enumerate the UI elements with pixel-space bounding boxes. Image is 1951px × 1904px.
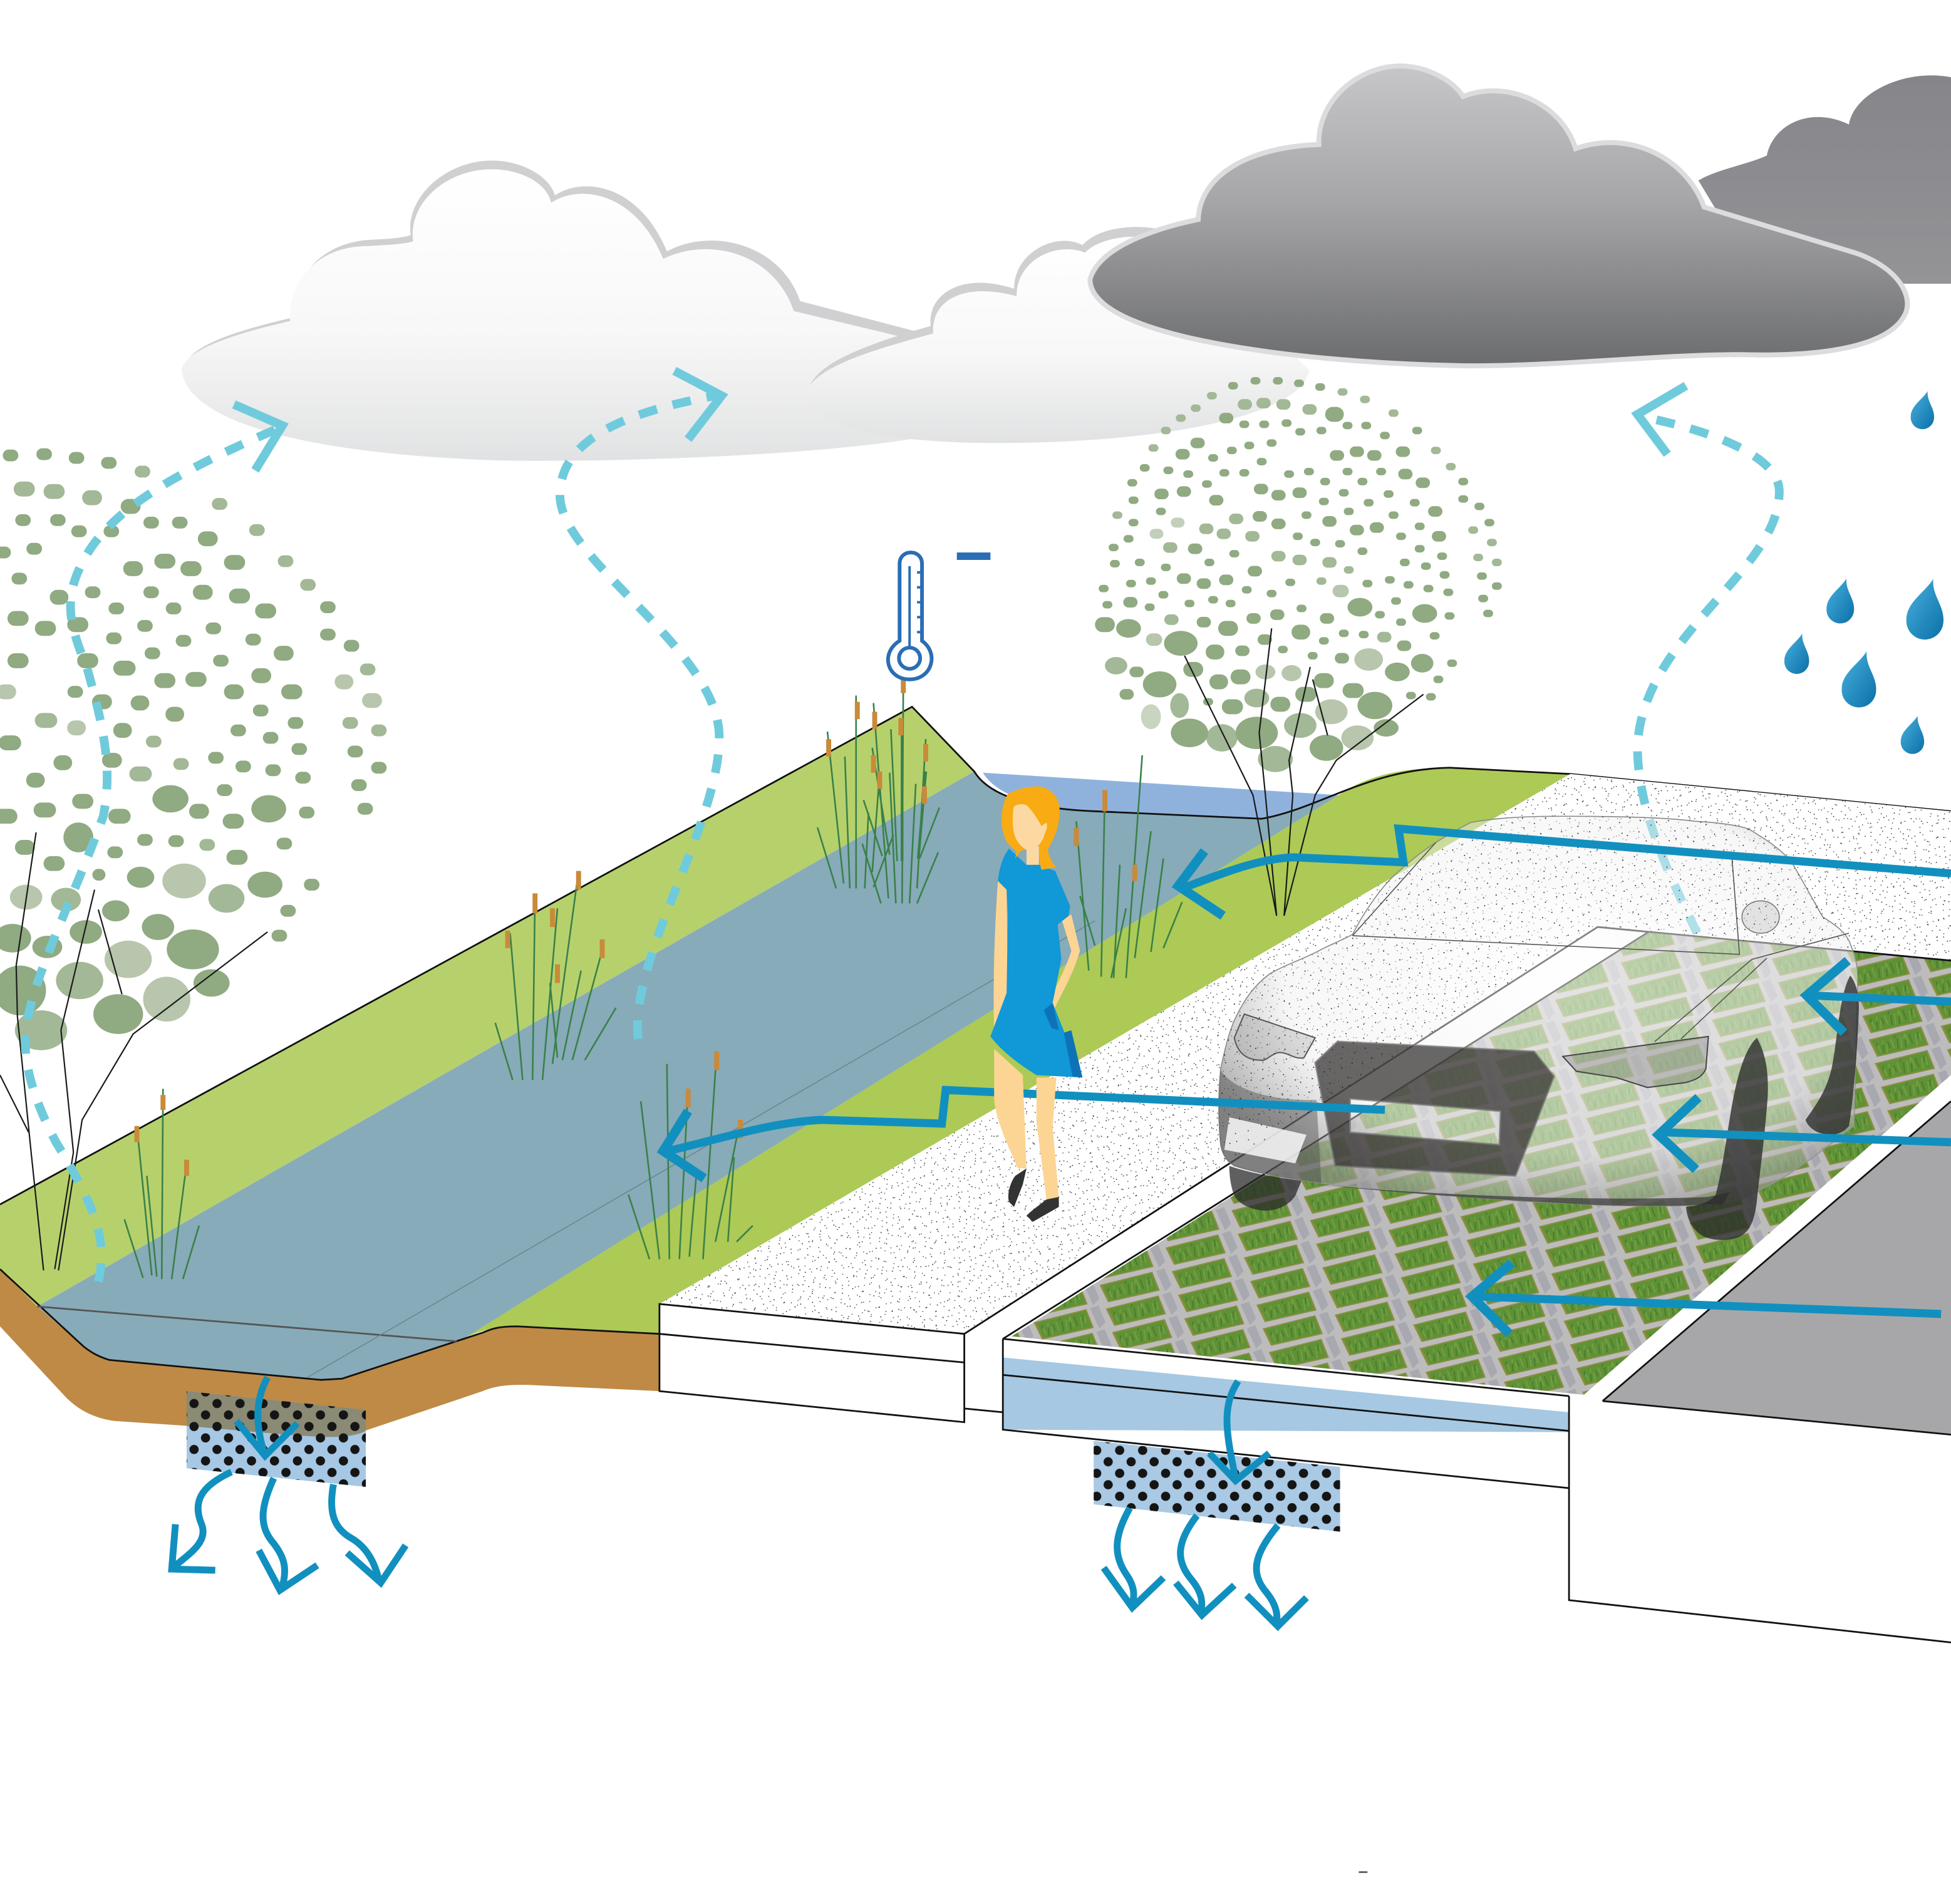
cloud: dark storm cloud: [1092, 68, 1905, 363]
car headlight left: [1234, 1014, 1315, 1060]
road: asphalt: [1603, 1101, 1951, 1435]
car left bumper shading: [1219, 1070, 1322, 1183]
arrow: out left: [1104, 1508, 1163, 1608]
car: translucent parked car: [1218, 815, 1859, 1240]
arrow: out right: [331, 1484, 406, 1583]
car body: [1219, 816, 1858, 1206]
blue arrow: runoff from sidewalk to swale, upper: [1178, 829, 1951, 916]
curb: white band beside road: [1584, 1075, 1951, 1401]
arrow: out right: [1247, 1526, 1307, 1627]
small mark near bottom edge: [1358, 1871, 1367, 1873]
neck: [1027, 846, 1039, 865]
dashed arrow: evapotranspiration left: [25, 405, 282, 1281]
reeds: group four: [817, 676, 939, 903]
arrow: out centre: [1176, 1516, 1234, 1615]
legs: [994, 1049, 1059, 1199]
car wheel front left: [1229, 1166, 1302, 1211]
curb: white band around parking strip: [965, 927, 1951, 1339]
car underside band: [1295, 1182, 1729, 1206]
dress pocket: [1044, 1003, 1082, 1077]
ground: soil section: [0, 1269, 660, 1431]
infiltration arrows: pavement: [1104, 1381, 1307, 1627]
car stipple showing through: [1221, 816, 1849, 1155]
face: [1013, 804, 1047, 850]
infiltration arrows: swale: [172, 1377, 406, 1590]
swale: left vegetated bank: [0, 706, 975, 1306]
shoes: [1008, 1168, 1059, 1222]
arrow: out centre: [259, 1478, 318, 1590]
sidewalk: stippled porous paving: [660, 774, 1951, 1334]
car headlight right: [1563, 1037, 1709, 1087]
icon: thermometer: [888, 552, 931, 680]
gravel layer: left infiltration: [187, 1391, 366, 1487]
arrow: out left: [172, 1472, 232, 1570]
gravel layer: right infiltration: [1094, 1441, 1340, 1532]
cloud: white left cloud: [182, 160, 971, 461]
car windshield lines: [1352, 842, 1849, 1042]
blue arrow: road runoff to pavers, top: [1807, 961, 1951, 1033]
tree: left trunk and branches: [0, 832, 267, 1270]
icon: minus sign for lower temperature: [957, 552, 990, 560]
dashed arrow: evapotranspiration middle: [560, 371, 722, 1039]
pavement section: layered front faces: [660, 927, 1951, 1642]
car mirror: [1742, 901, 1779, 933]
tree: centre tree canopy: [1102, 381, 1498, 772]
car wheel rear right: [1806, 976, 1859, 1135]
arrow: into gravel: [1209, 1381, 1269, 1481]
blue arrow: road runoff to pavers, middle: [1659, 1097, 1951, 1169]
tree: left tree canopy: [0, 454, 381, 1050]
reeds: group two: [495, 871, 616, 1080]
swale: section lines: [0, 706, 1951, 1380]
tree: centre trunk and branches: [1184, 628, 1424, 916]
car wheel front right: [1686, 1038, 1768, 1240]
swale: back water: [983, 773, 1339, 819]
car grille with plate opening: [1315, 1042, 1554, 1176]
reeds: group one: [125, 1089, 199, 1279]
reeds: group three: [628, 1052, 753, 1259]
swale: water surface: [38, 772, 1339, 1380]
car fog lamp highlight: [1224, 1117, 1307, 1164]
person: woman in blue dress: [990, 787, 1082, 1222]
parking strip: grass pavers: [1012, 932, 1951, 1395]
arms: [994, 881, 1080, 1037]
car paver wash: [1267, 932, 1858, 1205]
hair: [1001, 787, 1060, 870]
cloud: far right dark cloud: [1699, 75, 1951, 284]
dress: [990, 849, 1082, 1077]
arrow: into gravel: [236, 1377, 298, 1456]
dashed arrow: evapotranspiration right: [1637, 386, 1779, 933]
rain drops: [1784, 391, 1943, 754]
swale: right vegetated bank: [465, 768, 1570, 1338]
reeds: group five: [1076, 755, 1182, 978]
blue arrow: road runoff to pavers, bottom: [1472, 1263, 1941, 1334]
blue arrow: runoff from car to swale, lower: [663, 1090, 1385, 1178]
cloud: white middle cloud: [806, 227, 1309, 443]
